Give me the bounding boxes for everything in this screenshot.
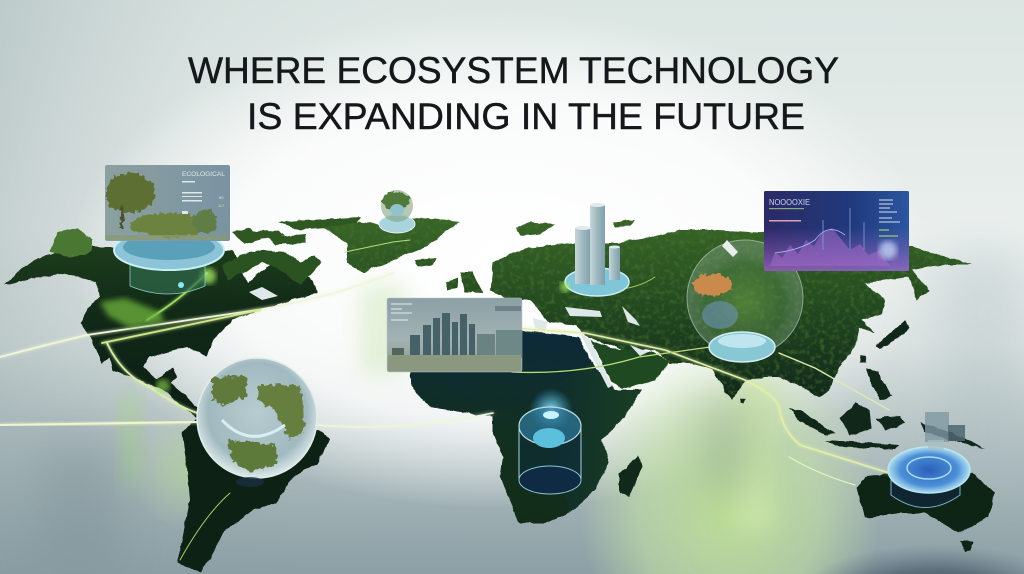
map: sea gaps	[249, 287, 648, 388]
icon: blue glass cylinder over Africa	[519, 388, 581, 494]
map: Africa and Madagascar	[410, 330, 669, 523]
panel: forest data card: 117	[218, 203, 225, 208]
panel: forest data card	[105, 165, 230, 241]
glow network lines	[0, 240, 889, 560]
panel: city skyline card	[387, 298, 522, 372]
glowing highlight on North America	[100, 268, 216, 393]
device: glass dish over North America	[114, 230, 224, 294]
icon: glass globe over Asia	[687, 240, 803, 362]
panel: data chart card: NOOOOXIE	[769, 198, 810, 207]
map: South America	[177, 417, 330, 572]
title	[188, 50, 839, 137]
map: Eurasia	[447, 220, 972, 400]
icon: small glass globe over Greenland	[379, 190, 415, 233]
title: IS EXPANDING IN THE FUTURE	[247, 96, 805, 137]
map: Greenland and Iceland	[325, 217, 460, 273]
panel: data chart card	[764, 191, 909, 271]
world map	[5, 217, 995, 572]
map: Southeast Asia islands	[740, 320, 985, 449]
panel: forest data card: 60	[219, 195, 224, 200]
panel: forest data card: ECOLOGICAL	[182, 171, 225, 178]
icon: cylinder towers over Europe	[560, 203, 629, 296]
title: WHERE ECOSYSTEM TECHNOLOGY	[188, 50, 839, 91]
icon: glass sphere with forest over South America	[197, 358, 317, 487]
map: North America	[5, 217, 360, 418]
map: Australia and Tasmania	[857, 473, 995, 552]
icon: blue disc device over Australia	[888, 412, 970, 508]
